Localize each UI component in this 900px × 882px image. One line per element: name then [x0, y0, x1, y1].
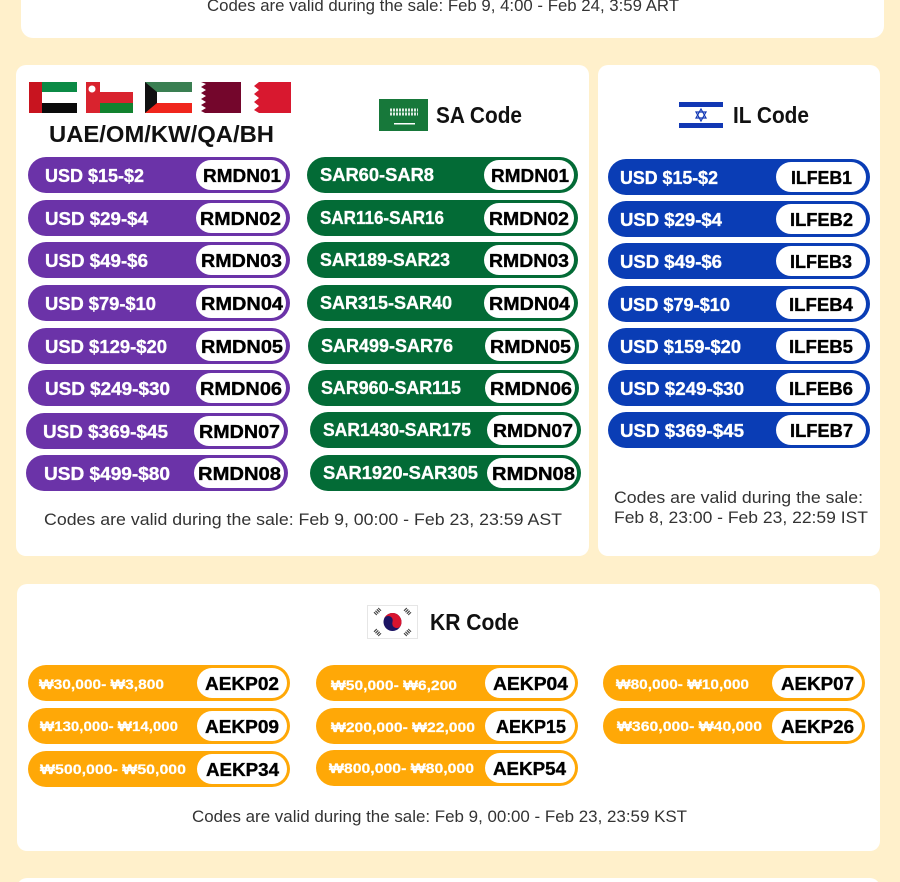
- code pill: USD $29-$4: RMDN02: [200, 209, 281, 229]
- code pill: SAR1430-SAR175: SAR1430-SAR175: [323, 420, 471, 440]
- icon: Qatar flag: [201, 82, 241, 113]
- code pill: ₩50,000-₩6,200: ₩50,000- ₩6,200: [331, 677, 457, 693]
- icon: Bahrain flag: [253, 82, 291, 113]
- code pill: USD $249-$30: ILFEB6: [789, 379, 853, 399]
- code pill: USD $159-$20: USD $159-$20: [620, 337, 741, 357]
- code pill: USD $249-$30: [28, 370, 290, 406]
- code pill: SAR60-SAR8: SAR60-SAR8: [320, 165, 434, 185]
- code pill: ₩360,000-₩40,000: [603, 708, 865, 744]
- code pill: USD $499-$80: [26, 455, 288, 491]
- code pill: USD $79-$10: [28, 285, 290, 321]
- icon: Israel flag: [679, 101, 723, 128]
- code pill: USD $49-$6: RMDN03: [201, 251, 282, 271]
- code pill: USD $249-$30: USD $249-$30: [620, 379, 744, 399]
- code pill: SAR499-SAR76: SAR499-SAR76: [321, 336, 453, 356]
- code pill: USD $369-$45: [608, 412, 870, 448]
- code pill: USD $159-$20: ILFEB5: [789, 337, 853, 357]
- code pill: ₩800,000-₩80,000: ₩800,000- ₩80,000: [329, 760, 474, 776]
- code pill: USD $15-$2: ILFEB1: [791, 168, 852, 188]
- code pill: USD $49-$6: ILFEB3: [790, 252, 852, 272]
- code pill: USD $249-$30: RMDN06: [200, 379, 282, 399]
- code pill: SAR116-SAR16: [307, 200, 578, 236]
- code pill: SAR960-SAR115: RMDN06: [490, 379, 572, 399]
- code pill: USD $49-$6: USD $49-$6: [620, 252, 722, 272]
- panel: bottom card: [17, 878, 880, 882]
- code pill: SAR189-SAR23: [307, 242, 578, 278]
- code pill: USD $79-$10: [608, 286, 870, 322]
- icon: UAE flag: [29, 82, 77, 113]
- code pill: SAR116-SAR16: SAR116-SAR16: [320, 208, 444, 228]
- code pill: SAR315-SAR40: SAR315-SAR40: [320, 293, 452, 313]
- code pill: SAR960-SAR115: SAR960-SAR115: [321, 378, 461, 398]
- icon: Saudi flag: [379, 99, 428, 131]
- code pill: SAR499-SAR76: [308, 328, 579, 364]
- code pill: ₩500,000-₩50,000: AEKP34: [206, 760, 279, 780]
- code pill: USD $29-$4: USD $29-$4: [620, 210, 722, 230]
- code pill: ₩800,000-₩80,000: AEKP54: [493, 759, 566, 779]
- code pill: USD $369-$45: RMDN07: [199, 422, 280, 442]
- heading: KR Code: KR Code: [430, 609, 519, 635]
- code pill: USD $129-$20: USD $129-$20: [45, 337, 167, 357]
- code pill: ₩30,000-₩3,800: [28, 665, 290, 701]
- code pill: USD $369-$45: ILFEB7: [790, 421, 853, 441]
- code pill: SAR1920-SAR305: SAR1920-SAR305: [323, 463, 478, 483]
- code pill: ₩50,000-₩6,200: AEKP04: [493, 674, 568, 694]
- code pill: ₩130,000-₩14,000: AEKP09: [205, 717, 279, 737]
- code pill: ₩80,000-₩10,000: AEKP07: [781, 674, 854, 694]
- code pill: SAR189-SAR23: RMDN03: [489, 251, 569, 271]
- code pill: USD $499-$80: RMDN08: [198, 464, 281, 484]
- code pill: SAR60-SAR8: [307, 157, 578, 193]
- code pill: USD $129-$20: [28, 328, 290, 364]
- code pill: ₩130,000-₩14,000: ₩130,000- ₩14,000: [40, 718, 178, 734]
- code pill: USD $369-$45: USD $369-$45: [43, 422, 168, 442]
- code pill: USD $15-$2: RMDN01: [203, 166, 281, 186]
- validity note: AST: Codes are valid during the sale: Feb 9, 00:00 - Feb 23, 23:59 AST: [44, 510, 562, 529]
- code pill: SAR116-SAR16: RMDN02: [489, 209, 569, 229]
- code pill: USD $29-$4: [28, 200, 290, 236]
- code pill: ₩800,000-₩80,000: [316, 750, 578, 786]
- code pill: USD $79-$10: USD $79-$10: [45, 294, 156, 314]
- code pill: USD $15-$2: USD $15-$2: [45, 166, 144, 186]
- code pill: USD $369-$45: USD $369-$45: [620, 421, 744, 441]
- panel: top card: [21, 0, 884, 38]
- code pill: ₩30,000-₩3,800: AEKP02: [205, 674, 279, 694]
- code pill: USD $15-$2: USD $15-$2: [620, 168, 718, 188]
- code pill: USD $15-$2: [28, 157, 290, 193]
- code pill: SAR60-SAR8: RMDN01: [491, 166, 569, 186]
- code pill: ₩200,000-₩22,000: AEKP15: [496, 717, 566, 737]
- code pill: USD $49-$6: [608, 243, 870, 279]
- code pill: SAR315-SAR40: [307, 285, 578, 321]
- code pill: USD $49-$6: USD $49-$6: [45, 251, 148, 271]
- panel: IL codes: [598, 65, 880, 556]
- code pill: ₩500,000-₩50,000: [28, 751, 290, 787]
- code pill: ₩30,000-₩3,800: ₩30,000- ₩3,800: [39, 676, 164, 692]
- code pill: USD $29-$4: ILFEB2: [790, 210, 853, 230]
- code pill: USD $15-$2: [608, 159, 870, 195]
- code pill: SAR1430-SAR175: RMDN07: [493, 421, 573, 441]
- code pill: USD $79-$10: ILFEB4: [789, 295, 853, 315]
- code pill: USD $49-$6: [28, 242, 290, 278]
- code pill: ₩500,000-₩50,000: ₩500,000- ₩50,000: [40, 761, 186, 777]
- code pill: ₩360,000-₩40,000: AEKP26: [781, 717, 854, 737]
- panel: KR codes: [17, 584, 880, 851]
- code pill: USD $249-$30: [608, 370, 870, 406]
- code pill: SAR499-SAR76: RMDN05: [490, 337, 571, 357]
- code pill: USD $159-$20: [608, 328, 870, 364]
- code pill: SAR1430-SAR175: [310, 412, 581, 448]
- heading: SA Code: SA Code: [436, 102, 522, 128]
- validity note: IST: Feb 8, 23:00 - Feb 23, 22:59 IST: [614, 508, 868, 527]
- heading: UAE/OM/KW/QA/BH: UAE/OM/KW/QA/BH: [49, 121, 274, 147]
- code pill: SAR960-SAR115: [308, 370, 579, 406]
- code pill: ₩360,000-₩40,000: ₩360,000- ₩40,000: [617, 718, 762, 734]
- validity note: KST: Codes are valid during the sale: Feb 9, 00:00 - Feb 23, 23:59 KST: [192, 807, 687, 826]
- validity note: IST: [614, 488, 868, 527]
- icon: Korea flag: [368, 606, 418, 638]
- code pill: ₩130,000-₩14,000: [28, 708, 290, 744]
- code pill: ₩80,000-₩10,000: [603, 665, 865, 701]
- code pill: ₩200,000-₩22,000: [316, 708, 578, 744]
- code pill: SAR315-SAR40: RMDN04: [489, 294, 570, 314]
- code pill: ₩200,000-₩22,000: ₩200,000- ₩22,000: [331, 719, 475, 735]
- code pill: USD $369-$45: [26, 413, 288, 449]
- code pill: USD $79-$10: USD $79-$10: [620, 295, 730, 315]
- code pill: USD $129-$20: RMDN05: [201, 337, 283, 357]
- heading: IL Code: IL Code: [733, 102, 809, 128]
- panel: UAE/OM/KW/QA/BH and SA codes: [16, 65, 589, 556]
- code pill: SAR189-SAR23: SAR189-SAR23: [320, 250, 450, 270]
- code pill: USD $29-$4: [608, 201, 870, 237]
- icon: Kuwait flag: [145, 82, 192, 113]
- icon: Oman flag: [86, 82, 133, 113]
- code pill: USD $249-$30: USD $249-$30: [45, 379, 170, 399]
- code pill: USD $29-$4: USD $29-$4: [45, 209, 148, 229]
- code pill: ₩50,000-₩6,200: [316, 665, 578, 701]
- code pill: USD $79-$10: RMDN04: [201, 294, 283, 314]
- code pill: USD $499-$80: USD $499-$80: [44, 464, 170, 484]
- validity note: IST: Codes are valid during the sale:: [614, 488, 863, 507]
- code pill: SAR1920-SAR305: [310, 455, 581, 491]
- code pill: ₩80,000-₩10,000: ₩80,000- ₩10,000: [616, 676, 749, 692]
- code pill: SAR1920-SAR305: RMDN08: [492, 464, 575, 484]
